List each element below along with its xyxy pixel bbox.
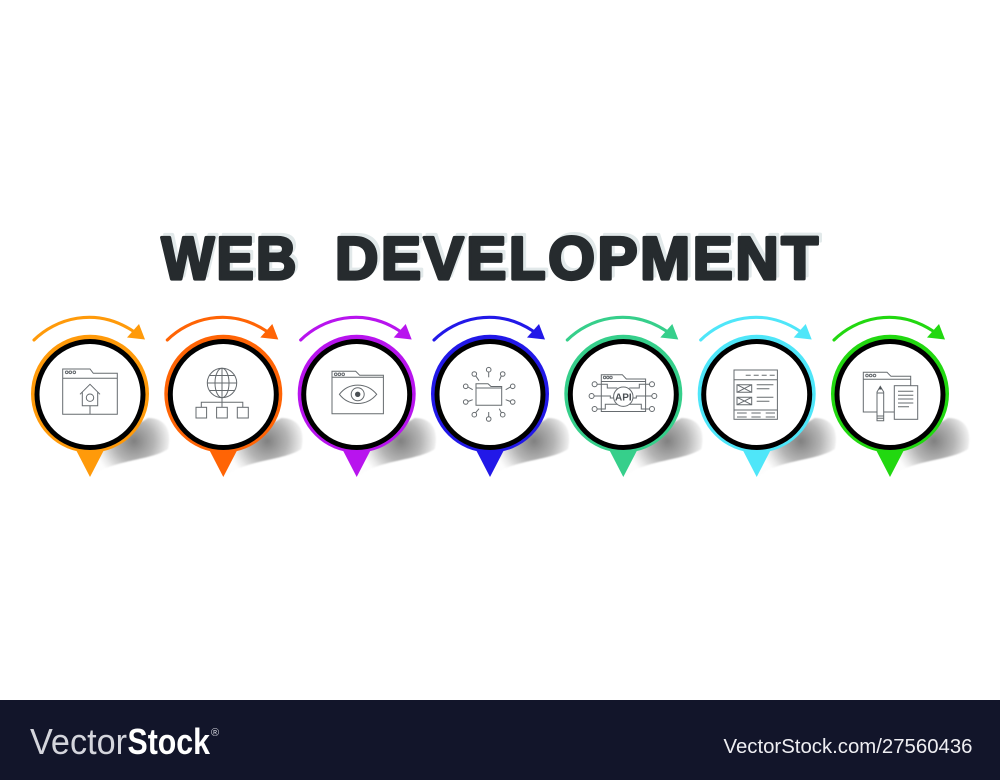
title: WEB DEVELOPMENT: DEVELOPMENT	[335, 225, 818, 292]
marker 7: folder with pencil and document	[831, 317, 969, 477]
marker 5: API folder	[564, 317, 702, 477]
icon: globe sitemap	[196, 368, 248, 418]
marker 3: web monitoring eye	[298, 317, 436, 477]
footer logo: VectorStock: ®	[211, 727, 219, 739]
icon: eye folder	[332, 371, 383, 414]
title: WEB DEVELOPMENT: WEB	[162, 226, 299, 292]
marker 1: website home folder	[31, 317, 169, 477]
icon: home folder	[63, 369, 117, 414]
icon: API circuit folder: API	[615, 392, 632, 403]
icon: folder, pencil, document	[863, 372, 918, 421]
footer logo: VectorStock	[30, 721, 219, 762]
icon: API circuit folder	[589, 375, 657, 412]
marker 4: connected folder	[431, 317, 569, 477]
footer bar	[0, 700, 1000, 780]
footer logo: VectorStock: Vector	[30, 721, 127, 762]
marker 6: wireframe page	[698, 317, 836, 477]
marker 2: site structure globe	[164, 317, 302, 477]
footer image id: VectorStock.com/27560436	[724, 736, 972, 758]
icon: network folder	[463, 367, 515, 421]
icon: page wireframe	[734, 370, 777, 419]
footer logo: VectorStock: Stock	[128, 721, 211, 762]
